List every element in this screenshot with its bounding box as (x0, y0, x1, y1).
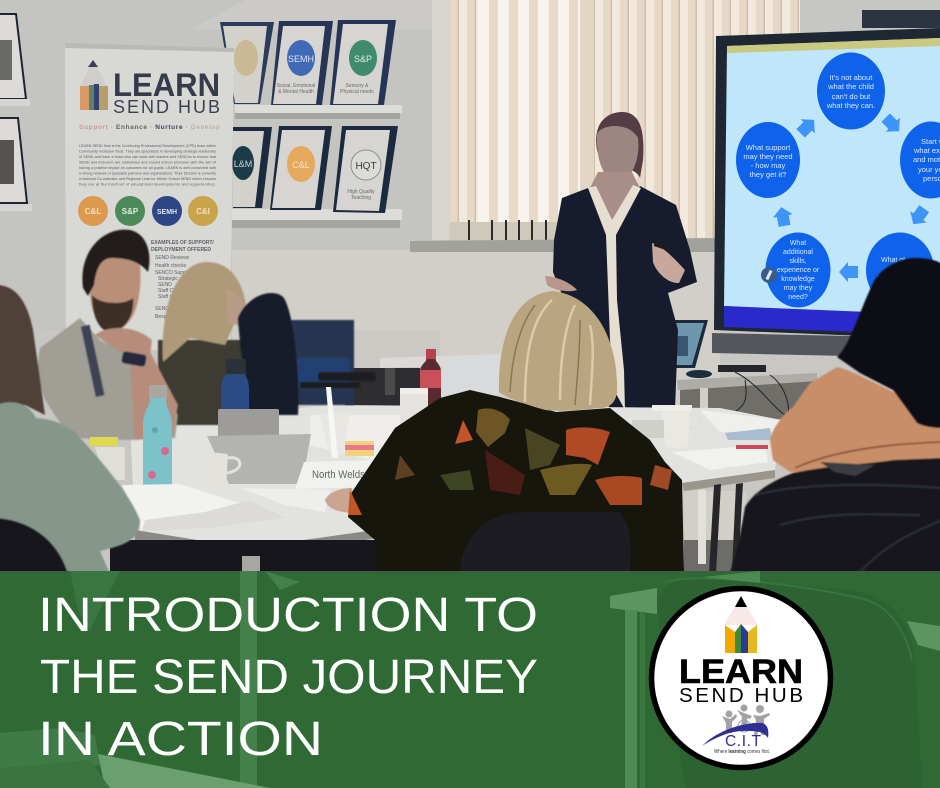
person: left woman in green top (0, 285, 140, 574)
slide circle: left: What support (746, 143, 791, 152)
banner paragraph: having a positive impact on outcomes for all pupils. LEARN is well connected with (79, 166, 216, 170)
left table objects (90, 385, 420, 531)
slide circle: bottom left (766, 232, 830, 308)
speaker face (597, 126, 638, 184)
shelf upper (235, 105, 402, 113)
frame: L and M (232, 127, 272, 208)
speaker (545, 112, 697, 410)
slide circle: bottom right: What ot (881, 257, 905, 264)
frame: S and P: S&P (354, 54, 372, 64)
backpack (730, 458, 940, 572)
leaf jacket (348, 390, 684, 572)
banner paragraph (79, 144, 216, 186)
paper cup white (319, 412, 350, 455)
title (38, 589, 538, 766)
slide circle: top: It's not about (830, 73, 873, 82)
back table and laptop (672, 320, 817, 422)
frame: HQT: HQT (355, 161, 377, 172)
mug beside left woman (95, 447, 125, 480)
right table papers (672, 410, 780, 470)
slide circle: bottom left: may they (784, 285, 813, 292)
right table mug (632, 405, 700, 448)
logo tagline: Where learning comes first. (714, 749, 770, 755)
logo wordmark: LEARN (679, 653, 803, 691)
name card: North Welds E (312, 469, 374, 481)
title: IN ACTION (38, 713, 323, 766)
blue water bottle (221, 359, 249, 410)
soda bottle (420, 349, 441, 410)
frame: S and P (330, 20, 396, 105)
papers and sticky notes (90, 415, 420, 462)
presentation screen (712, 28, 940, 358)
frame: HQT: High Quality (347, 189, 375, 195)
white flask cup (400, 391, 428, 435)
banner paragraph: SEND and inclusion are embedded and valued school provision with the aim of (79, 160, 216, 164)
slide circle: left: may they need (743, 152, 793, 161)
banner badges: C&I (196, 207, 210, 216)
banner strapline: Support · Enhance · Nurture · Develop (79, 124, 220, 131)
frame: C and L orange (270, 126, 332, 210)
back table items (400, 349, 780, 470)
banner list: SEND (158, 282, 172, 288)
slide circle: left (736, 122, 800, 198)
slide circle: top: can't do but (832, 92, 871, 101)
title: THE SEND JOURNEY (40, 651, 538, 704)
slide circle: top: what the child (827, 82, 874, 91)
chair back (460, 512, 631, 572)
banner badges (78, 196, 218, 226)
coffee mug (196, 453, 240, 492)
icon: pencil (724, 596, 758, 653)
frame: S and P: Sensory & (345, 83, 369, 89)
speaker hair (596, 112, 643, 178)
banner list: Bespoke (155, 314, 175, 320)
speaker cardigan (553, 186, 697, 410)
speaker neck (590, 172, 640, 230)
banner paragraph: they are at the forefront of educational developments and opportunities. (79, 182, 216, 186)
papers pile (122, 484, 285, 531)
framed posters on shelves (220, 20, 402, 228)
meeting table (110, 405, 782, 575)
banner badges: S&P (122, 207, 139, 216)
roller banner (65, 43, 234, 350)
card on laptop (218, 409, 279, 439)
wall frames left (0, 14, 32, 211)
speaker hands (545, 242, 685, 291)
banner list: EXAMPLES OF SUPPORT/ (151, 240, 214, 246)
slide circle: right: what ex (913, 146, 940, 155)
slide circle: bottom left: experience or (777, 267, 820, 274)
banner logo text: LEARN (113, 67, 220, 103)
banner list (151, 240, 214, 320)
room walls (0, 0, 940, 420)
slide circle: top (817, 52, 885, 130)
frame: S and P: Physical needs (340, 89, 374, 95)
icon: three children figures (722, 704, 770, 735)
banner list: Staff mentoring (158, 294, 192, 300)
banner list: Strategic (158, 276, 178, 282)
slide circle: left: - how may (751, 161, 786, 170)
slide circle: bottom right: gif (893, 266, 900, 273)
slide circle: bottom left: need? (788, 294, 808, 301)
slide circle: right (900, 122, 940, 198)
slide circle: top: what they can. (826, 101, 875, 110)
frame: SEMH: & Mental Health (278, 89, 314, 95)
frame: HQT: Teaching (351, 195, 371, 201)
person: man in grey sweater (36, 230, 178, 440)
frame: HQT (333, 126, 398, 213)
roller banner: SEND HUB (113, 97, 220, 117)
banner paragraph: a strong network of specialist partners and organisations. Their Director is currently (79, 172, 216, 176)
logo C.I.T: C.I.T (725, 733, 762, 750)
swoosh (702, 723, 768, 746)
windowsill (410, 238, 720, 252)
computer mouse (686, 370, 712, 378)
frame: SEMH (271, 21, 333, 105)
back table left (345, 354, 500, 414)
white laptop (432, 354, 506, 412)
slide circle: bottom right (866, 232, 934, 308)
person: blonde woman behind table (158, 262, 255, 425)
frame: C and L faded (220, 22, 274, 104)
banner list: SENCO Support (155, 270, 192, 276)
banner list: DEPLOYMENT OFFERED (151, 247, 211, 253)
banner paragraph: Community Inclusion Trust. They are specialists in developing strategic leadership (79, 150, 216, 154)
banner badges: C&L (85, 207, 101, 216)
pen tool icon (761, 267, 777, 283)
green banner (0, 571, 940, 788)
slide circle: right: and mot (913, 155, 940, 164)
slide circle: bottom left: knowledge (781, 276, 815, 283)
hand on papers (325, 488, 352, 513)
slide circle: bottom left: skills, (789, 258, 807, 265)
laptop behind speaker (672, 320, 708, 368)
banner list: Staff CPD (158, 288, 181, 294)
banner list: SEND Reviews (155, 255, 190, 261)
chair back (0, 518, 68, 574)
slide circle: bottom left: additional (783, 249, 813, 256)
name card (295, 460, 382, 489)
slide circle: bottom right: tale (877, 275, 888, 282)
banner list: SEND Support (155, 306, 188, 312)
person: woman with blonde bob and leaf-print jacket (348, 291, 684, 572)
person: woman with dark hair in orange top (730, 258, 940, 572)
photo: training session (0, 0, 940, 575)
banner paragraph: a National Co-ordinator and Regional Lead for Whole School SEND which ensures (79, 177, 216, 181)
blonde bob (499, 291, 617, 411)
title: INTRODUCTION TO (38, 589, 538, 642)
slide circle: bottom left: What (790, 240, 806, 247)
banner paragraph: LEARN SEND Hub is the Continuing Professional Development (CPD) team within (79, 144, 216, 148)
frame: SEMH: SEMH (288, 54, 314, 64)
slide arrows (771, 111, 932, 282)
banner paragraph: of SEND and have a team who can work with leaders and SENCos to ensure that (79, 155, 216, 159)
empty chair with jacket (238, 293, 376, 415)
cardigan trim (588, 185, 641, 410)
frame: C and L orange: C&L (292, 160, 310, 170)
banner logo pencil (80, 60, 108, 110)
window blinds (450, 0, 800, 240)
banner badges: SEMH (157, 209, 177, 216)
slide circle: left: they get it? (750, 170, 786, 179)
teal flask (143, 385, 172, 485)
ghosted photo background (0, 571, 940, 788)
shelf lower (232, 209, 402, 220)
frame: SEMH: Social, Emotional (277, 83, 315, 89)
banner list: Health checks (155, 263, 187, 269)
logo subline: SEND HUB (679, 684, 803, 707)
grey laptop stand (207, 434, 311, 484)
logo: Learn SEND Hub (652, 588, 830, 768)
frame: L and M: L&M (234, 159, 252, 169)
